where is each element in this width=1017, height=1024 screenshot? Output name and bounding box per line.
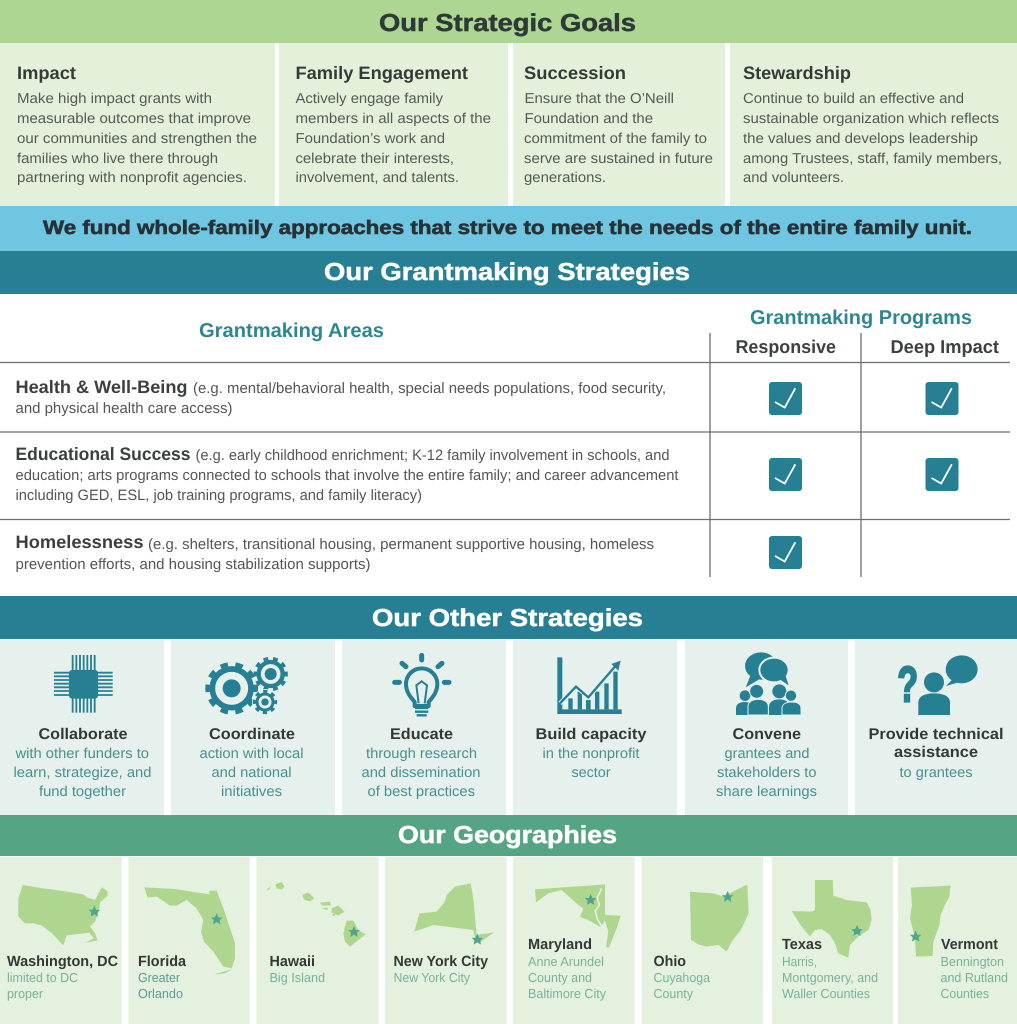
- panel: Collaborate: Collaborate: [38, 726, 128, 743]
- icon: person with question and speech bubble: [897, 655, 978, 715]
- panel: Educate: Educate: [390, 726, 453, 743]
- panel: Educate: of best practices: [368, 784, 475, 800]
- row: Homelessness: Homelessness: [16, 532, 144, 552]
- panel: Stewardship: [730, 43, 1017, 206]
- heading band: Our Grantmaking Strategies: Our Grantmaking Strategies: [324, 259, 690, 286]
- heading band: Our Strategic Goals: Our Strategic Goals: [379, 10, 636, 37]
- icon: group with speech bubbles: [736, 652, 801, 715]
- panel: Florida: Greater: [138, 970, 181, 985]
- panel: Maryland: County and: [528, 970, 592, 985]
- row: Educational Success: including GED, ESL, job training programs, and family literacy): [16, 487, 422, 504]
- icon: Ohio map: [690, 884, 749, 952]
- panel: Build capacity: Build capacity: [536, 726, 647, 743]
- row: Educational Success: [16, 444, 679, 504]
- row: Homelessness: prevention efforts, and housing stabilization supports): [16, 556, 370, 573]
- panel: Provide technical assistance: to grantees: [900, 765, 972, 781]
- panel: Ohio: County: [654, 986, 693, 1001]
- heading band: Our Grantmaking Strategies: [0, 251, 1017, 294]
- heading band: Our Other Strategies: [0, 596, 1017, 639]
- panel: Vermont: Vermont: [941, 937, 998, 953]
- panel: Educate: through research: [366, 746, 477, 762]
- icon: check Homelessness Responsive: [769, 536, 802, 569]
- panel: Washington, DC: proper: [7, 986, 44, 1001]
- panel: Collaborate: learn, strategize, and: [14, 765, 152, 781]
- panel: Stewardship: among Trustees, staff, family members,: [743, 151, 1002, 167]
- icon: US map: [18, 885, 108, 945]
- panel: Succession: serve are sustained in future: [524, 151, 713, 167]
- panel: Educate: and dissemination: [362, 765, 480, 781]
- heading band: Our Geographies: Our Geographies: [398, 822, 617, 849]
- panel: Vermont: and Rutland: [940, 970, 1008, 985]
- panel: Maryland: Maryland: [528, 937, 592, 953]
- panel: Collaborate: fund together: [39, 784, 126, 800]
- panel: Build capacity: sector: [572, 765, 611, 781]
- panel: Impact: Impact: [17, 63, 76, 83]
- panel: Coordinate: and national: [212, 765, 292, 781]
- icon: Hawaii map: [266, 882, 366, 947]
- table headers: Responsive: [736, 336, 836, 357]
- icon: chip: [54, 655, 113, 713]
- panel: Washington, DC: [0, 857, 122, 1024]
- row: Homelessness: [16, 532, 654, 573]
- panel: Stewardship: and volunteers.: [743, 170, 844, 186]
- icon: light bulb: [395, 655, 449, 715]
- panel: Succession: commitment of the family to: [524, 131, 707, 147]
- panel: Coordinate: Coordinate: [209, 726, 295, 743]
- panel: Stewardship: the values and develops leadership: [743, 131, 978, 147]
- icon: Maryland map: [535, 884, 621, 948]
- panel: Build capacity: in the nonprofit: [542, 746, 640, 762]
- heading band: Our Other Strategies: Our Other Strategies: [372, 605, 643, 632]
- panel: Family Engagement: [279, 43, 508, 206]
- row: Educational Success: Educational Success: [16, 444, 190, 464]
- panel: Coordinate: action with local: [200, 746, 304, 762]
- row: Health and Well-Being: Health & Well-Being: [16, 377, 188, 397]
- panel: Succession: generations.: [524, 170, 606, 186]
- panel: Provide technical assistance: assistance: [894, 744, 978, 761]
- heading band: Our Strategic Goals: [0, 0, 1017, 43]
- panel: Convene: [685, 640, 848, 815]
- panel: Ohio: [642, 857, 763, 1024]
- panel: Impact: families who live there through: [17, 151, 218, 167]
- panel: Provide technical assistance: Provide technical: [868, 726, 1004, 743]
- panel: Florida: Florida: [138, 954, 187, 970]
- panel: Stewardship: Stewardship: [743, 63, 851, 83]
- panel: Impact: partnering with nonprofit agencies.: [17, 170, 247, 186]
- panel: Impact: our communities and strengthen the: [17, 131, 257, 147]
- panel: Family Engagement: members in all aspects of the: [296, 111, 491, 127]
- icon: Texas map: [792, 880, 872, 958]
- panel: Texas: Waller Counties: [782, 986, 870, 1001]
- panel: Texas: Texas: [782, 937, 822, 953]
- panel: Washington, DC: Washington, DC: [7, 954, 118, 970]
- panel: Succession: Succession: [524, 63, 626, 83]
- panel: Collaborate: with other funders to: [14, 746, 149, 762]
- table headers: Grantmaking Programs: [750, 307, 972, 329]
- panel: Texas: Harris,: [782, 954, 817, 969]
- panel: Florida: Orlando: [138, 986, 183, 1001]
- panel: Maryland: Baltimore City: [528, 986, 606, 1001]
- row: Homelessness: (e.g. shelters, transitional housing, permanent supportive housing, homeless: [148, 536, 654, 553]
- panel: New York City: New York City: [394, 954, 489, 970]
- panel: Vermont: [898, 857, 1017, 1024]
- panel: Hawaii: Hawaii: [270, 954, 315, 970]
- panel: Family Engagement: involvement, and talents.: [296, 170, 459, 186]
- icon: check Health Responsive: [769, 382, 802, 415]
- panel: Vermont: Bennington: [940, 954, 1004, 969]
- icon: Vermont map: [910, 886, 951, 957]
- panel: Convene: Convene: [732, 726, 801, 743]
- panel: Family Engagement: celebrate their interests,: [296, 151, 454, 167]
- panel: Texas: [772, 857, 893, 1024]
- panel: Convene: share learnings: [716, 784, 817, 800]
- panel: Hawaii: [256, 857, 378, 1024]
- panel: Ohio: Ohio: [654, 954, 686, 970]
- icon: person with question and speech bubble: ?: [897, 656, 918, 712]
- panel: New York City: New York City: [394, 970, 470, 985]
- icon: Florida map: [144, 887, 235, 974]
- icon: New York map: [414, 883, 494, 945]
- panel: Family Engagement: Actively engage family: [296, 91, 444, 107]
- icon: growth chart: [557, 657, 622, 714]
- panel: Stewardship: sustainable organization which reflects: [743, 111, 999, 127]
- panel: New York City: [385, 857, 506, 1024]
- table headers: [199, 307, 999, 357]
- row: Health and Well-Being: [16, 377, 666, 417]
- panel: Convene: grantees and: [724, 746, 810, 762]
- icon: check Education Responsive: [769, 458, 802, 491]
- panel: Texas: Montgomery, and: [782, 970, 878, 985]
- panel: Impact: Make high impact grants with: [17, 91, 212, 107]
- panel: Vermont: Counties: [940, 986, 989, 1001]
- panel: Provide technical assistance: [855, 640, 1017, 815]
- panel: Collaborate: [0, 640, 164, 815]
- panel: Maryland: Anne Arundel: [528, 954, 604, 969]
- callout band: whole-family approaches: [0, 206, 1017, 251]
- panel: Ohio: Cuyahoga: [654, 970, 711, 985]
- callout band: whole-family approaches: We fund whole-family approaches that strive to meet the needs of the entire family unit.: [43, 217, 972, 239]
- panel: Maryland: [513, 857, 634, 1024]
- panel: Convene: stakeholders to: [717, 765, 816, 781]
- panel: Succession: Ensure that the O’Neill: [524, 91, 674, 107]
- panel: Stewardship: Continue to build an effective and: [743, 91, 964, 107]
- panel: Florida: [128, 857, 250, 1024]
- table: grantmaking areas and programs: [0, 307, 1010, 577]
- panel: Build capacity: [513, 640, 677, 815]
- icon: check Education Deep Impact: [926, 458, 958, 491]
- panel: Washington, DC: limited to DC: [7, 970, 78, 985]
- table headers: Grantmaking Areas: [199, 320, 384, 342]
- panel: Succession: Foundation and the: [524, 111, 653, 127]
- row: Health and Well-Being: and physical health care access): [16, 400, 232, 417]
- panel: Impact: [0, 43, 275, 206]
- panel: Family Engagement: Foundation’s work and: [296, 131, 445, 147]
- panel: Coordinate: [171, 640, 335, 815]
- panel: Family Engagement: Family Engagement: [296, 63, 468, 83]
- panel: Hawaii: Big Island: [270, 970, 325, 985]
- icon: gears: [208, 659, 286, 715]
- row: Educational Success: education; arts programs connected to schools that involve the entire family; and career advancement: [16, 467, 679, 484]
- table headers: Deep Impact: [890, 336, 999, 357]
- panel: Educate: [342, 640, 506, 815]
- row: Educational Success: (e.g. early childhood enrichment; K-12 family involvement in schools, and: [196, 447, 670, 464]
- icon: check Health Deep Impact: [926, 382, 958, 415]
- heading band: Our Geographies: [0, 815, 1017, 856]
- panel: Succession: [513, 43, 725, 206]
- row: Health and Well-Being: (e.g. mental/behavioral health, special needs populations, food security,: [193, 380, 666, 397]
- panel: Coordinate: initiatives: [221, 784, 282, 800]
- panel: Impact: measurable outcomes that improve: [17, 111, 251, 127]
